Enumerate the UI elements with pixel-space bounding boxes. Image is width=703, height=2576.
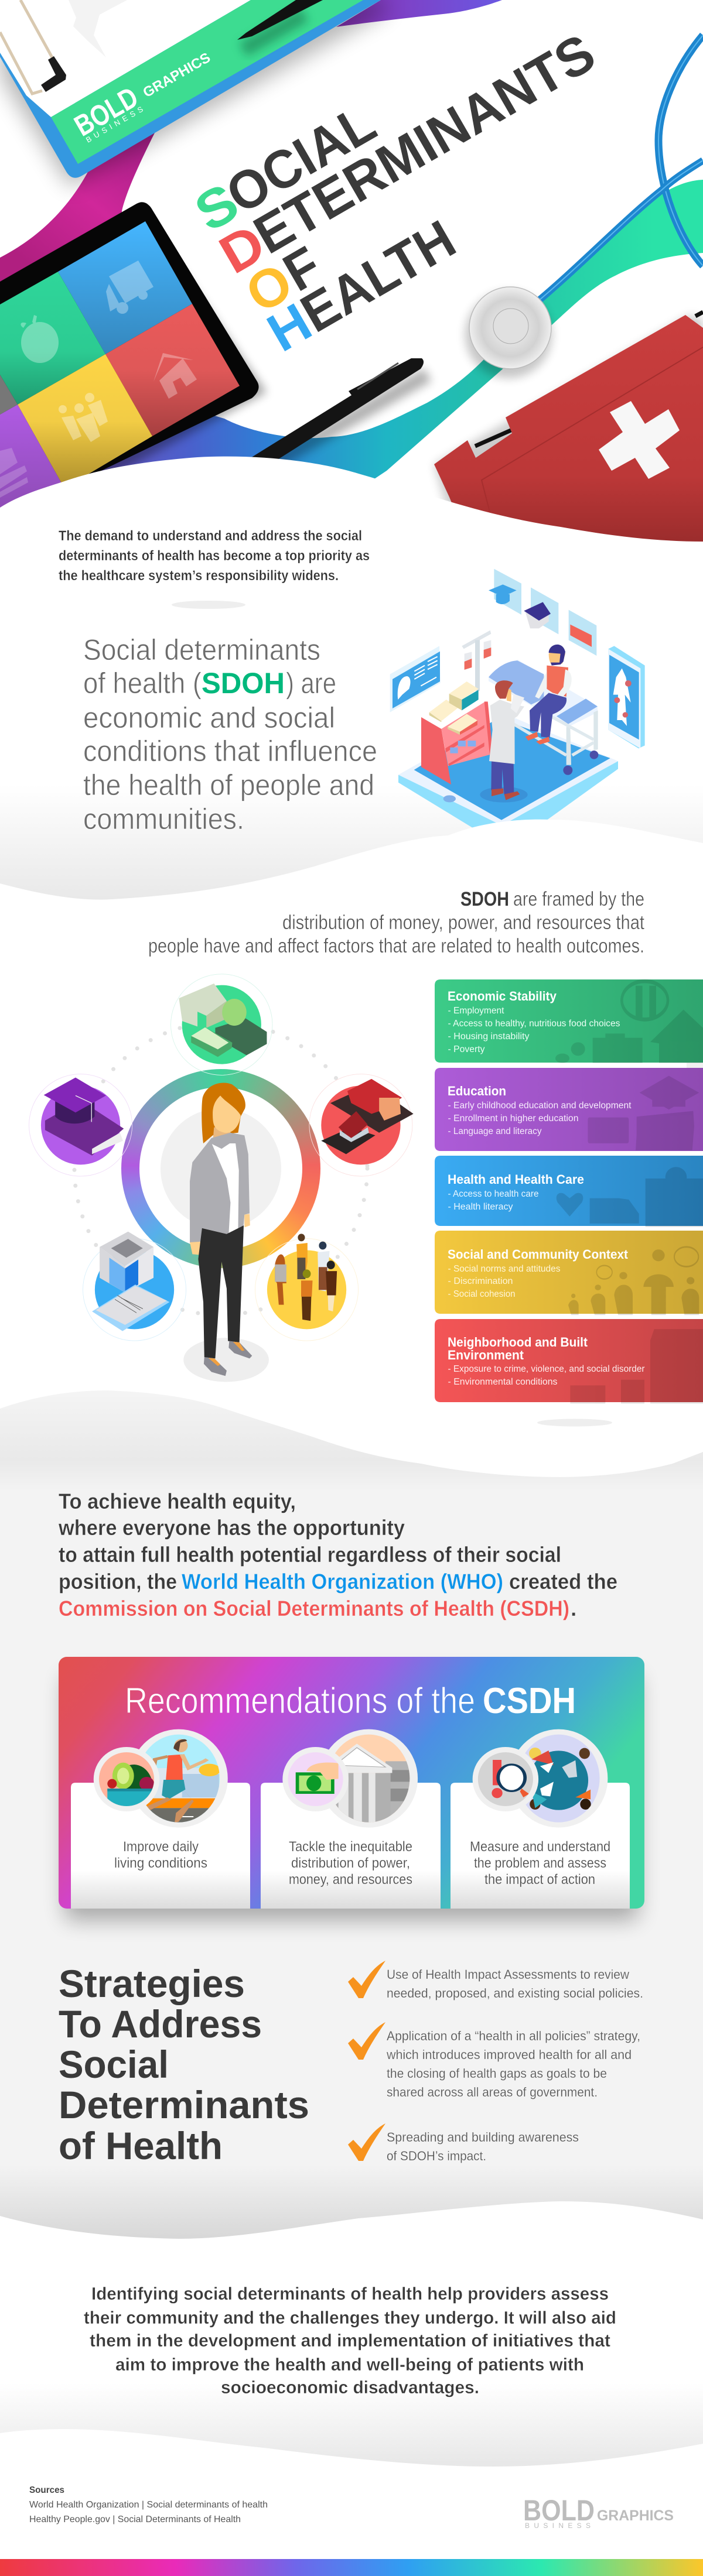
icon: ambulance <box>106 261 153 314</box>
card icons <box>568 1247 699 1315</box>
recommendation text 1: Improve daily <box>123 1839 199 1855</box>
dotted orbit <box>74 1022 367 1315</box>
rainbow footer bar <box>0 2559 703 2576</box>
SDOH bold: SDOH <box>460 888 509 910</box>
logo on clipboard: GRAPHICS <box>141 50 213 101</box>
card: economic stability <box>435 979 703 1063</box>
highlight: WHO: World Health Organization (WHO) <box>182 1570 503 1594</box>
footer logo: BUSINESS <box>525 2522 591 2530</box>
line: Of: F <box>274 235 331 303</box>
card: education: - Early childhood education and development <box>448 1101 632 1111</box>
circle: community <box>255 1234 359 1341</box>
IV stand <box>462 631 491 691</box>
pen body <box>243 358 424 463</box>
ring inner grey <box>161 1108 281 1229</box>
colored ring <box>121 1069 320 1268</box>
text <box>387 1967 643 2000</box>
card icons <box>557 1167 703 1227</box>
recommendation text 2 <box>289 1839 412 1888</box>
recommendation text 2: Tackle the inequitable <box>289 1839 412 1855</box>
line: Determinants: ETERMINANTS <box>244 23 605 265</box>
line: Social: S <box>185 172 248 243</box>
card: economic stability: - Employment <box>448 1006 504 1016</box>
footer logo <box>523 2494 674 2530</box>
card: economic stability: - Housing instability <box>448 1032 530 1042</box>
gradient swoosh: top purple <box>336 0 502 27</box>
text <box>386 2029 640 2099</box>
definition text: the health of people and <box>83 769 374 801</box>
recommendation icons <box>94 1729 608 1828</box>
card: education: - Enrollment in higher education <box>448 1114 579 1123</box>
card: social and community: - Social norms and attitudes <box>448 1264 561 1274</box>
pen on clipboard <box>237 0 323 40</box>
shirt <box>212 1143 239 1234</box>
card icons <box>555 981 703 1063</box>
logo on clipboard: BOLD <box>69 81 144 143</box>
icon: check <box>348 2123 385 2161</box>
pen clip <box>357 363 398 389</box>
white card 1 <box>71 1783 250 1909</box>
floating tile: education <box>489 569 521 615</box>
white wave under hero <box>0 457 703 820</box>
icon: runner <box>94 1729 228 1828</box>
recommendation text 3: the problem and assess <box>474 1855 606 1871</box>
card: health and health care: Health and Health Care <box>448 1172 584 1187</box>
small ellipse shadow 2 <box>537 1419 612 1426</box>
recommendation text 2: distribution of power, <box>291 1855 410 1871</box>
recommendations panel <box>59 1657 644 1909</box>
equity statement: To achieve health equity, <box>59 1489 296 1513</box>
line: Social: OCIAL <box>217 93 385 225</box>
tube highlight <box>529 160 703 309</box>
tablet <box>0 202 259 521</box>
card: economic stability: - Access to healthy, nutritious food choices <box>448 1019 620 1029</box>
foot right <box>233 1342 244 1351</box>
second wave <box>0 820 703 1417</box>
intro paragraph: the healthcare system’s responsibility widens. <box>59 568 339 584</box>
circle: education <box>29 1074 132 1176</box>
intro paragraph: determinants of health has become a top priority as <box>59 548 370 564</box>
card: education: - Language and literacy <box>448 1126 542 1136</box>
face <box>213 1095 241 1133</box>
card: social and community: - Social cohesion <box>448 1289 516 1299</box>
gap block <box>687 1063 703 1068</box>
text <box>387 2130 579 2163</box>
equity statement <box>58 1489 617 1621</box>
strategies heading: Social <box>59 2043 169 2086</box>
card: economic stability: - Poverty <box>448 1044 485 1054</box>
card: education <box>435 1068 703 1151</box>
loop highlight <box>658 35 703 266</box>
card: social and community: - Discrimination <box>448 1276 513 1286</box>
pen shadow on band <box>243 15 305 50</box>
shelf <box>421 681 493 785</box>
card: social and community <box>435 1231 703 1315</box>
definition text: communities. <box>83 803 244 835</box>
text: which introduces improved health for all and <box>386 2047 632 2062</box>
text: shared across all areas of government. <box>387 2085 598 2099</box>
text: Use of Health Impact Assessments to review <box>387 1967 629 1982</box>
conclusion paragraph: their community and the challenges they undergo. It will also aid <box>84 2307 616 2328</box>
shoe right <box>228 1341 252 1358</box>
doctor <box>480 680 528 803</box>
framing text <box>148 888 644 957</box>
determinant cards <box>435 979 703 1404</box>
highlight: CSDH: Commission on Social Determinants of Health (CSDH) <box>59 1597 569 1621</box>
text: the closing of health gaps as goals to be <box>387 2066 607 2081</box>
footer grey band <box>0 2383 703 2471</box>
definition text <box>83 633 377 835</box>
stethoscope tube <box>529 160 703 309</box>
metal clip <box>0 0 53 94</box>
conclusion paragraph <box>84 2283 616 2397</box>
circle: neighborhood <box>309 1074 414 1176</box>
conclusion paragraph: Identifying social determinants of health help providers assess <box>91 2283 609 2304</box>
white cross <box>599 401 680 479</box>
text: Application of a “health in all policies” strategy, <box>387 2029 640 2043</box>
panel heading: Recommendations of the <box>125 1681 475 1721</box>
jacket <box>190 1133 250 1243</box>
right phone <box>608 646 645 748</box>
definition text: Social determinants <box>83 633 320 666</box>
conclusion paragraph: them in the development and implementation of initiatives that <box>90 2330 610 2351</box>
tablet shadow <box>0 211 267 515</box>
icon: magnifier and meeting <box>473 1729 608 1828</box>
text: Spreading and building awareness <box>387 2130 579 2145</box>
recommendation text 1: living conditions <box>114 1855 207 1871</box>
highlight: SDOH: SDOH <box>202 667 285 700</box>
card: health and health care: - Health literacy <box>448 1202 513 1212</box>
framing text: distribution of money, power, and resources that <box>282 912 644 934</box>
card: health and health care <box>435 1156 703 1227</box>
floating tile: work <box>569 610 596 656</box>
icon: people <box>59 393 108 442</box>
sources: Sources <box>29 2485 64 2495</box>
logo on clipboard: BUSINESS <box>84 104 145 145</box>
strategy 1 <box>348 1961 643 2000</box>
first aid kit <box>434 312 703 544</box>
sources: Healthy People.gov | Social Determinants of Health <box>29 2515 241 2524</box>
strategies heading: To Address <box>59 2002 262 2046</box>
recommendations card shadow <box>64 1674 639 1920</box>
equity statement: where everyone has the opportunity <box>58 1516 405 1540</box>
foot left <box>209 1358 220 1366</box>
icon: apple <box>21 315 59 363</box>
platform <box>398 714 618 831</box>
clipboard shadow <box>0 0 387 187</box>
framing text: are framed by the <box>513 888 644 910</box>
line: Of <box>236 235 331 324</box>
marker pen <box>243 358 424 463</box>
hand left <box>190 1242 203 1255</box>
conclusion paragraph: socioeconomic disadvantages. <box>221 2377 479 2397</box>
footer logo: GRAPHICS <box>597 2508 674 2524</box>
sources: World Health Organization | Social determinants of health <box>29 2500 268 2510</box>
card: neighborhood <box>435 1319 703 1404</box>
medical illustration <box>390 569 645 831</box>
kit slot <box>475 312 703 446</box>
circle: health care <box>83 1232 186 1341</box>
determinant illustrations <box>29 974 414 1382</box>
equity statement: position, the <box>59 1570 177 1594</box>
floating tile: housing <box>524 587 558 634</box>
blue tile <box>58 221 192 354</box>
conclusion paragraph: aim to improve the health and well-being of patients with <box>115 2354 584 2375</box>
grey band above second wave <box>0 785 703 913</box>
gradient swoosh: pink <box>0 132 155 304</box>
intro paragraph: The demand to understand and address the social <box>59 528 362 544</box>
marker pen shadow <box>264 375 428 468</box>
clipboard board <box>0 0 381 178</box>
card icons <box>570 1329 703 1404</box>
shadow <box>183 1338 269 1382</box>
red tile <box>105 304 240 436</box>
footer logo: BOLD <box>523 2494 595 2527</box>
icon: house <box>153 353 197 399</box>
logo on clipboard <box>69 50 213 145</box>
kit groove <box>482 347 703 521</box>
text: needed, proposed, and existing social policies. <box>387 1986 643 2000</box>
title <box>185 23 605 363</box>
line: Health: EALTH <box>291 209 465 344</box>
ring inner white <box>139 1087 302 1250</box>
woman figure <box>183 1083 269 1382</box>
definition text: economic and social <box>83 701 335 734</box>
equity statement: to attain full health potential regardless of their social <box>59 1543 561 1567</box>
strategies heading: of Health <box>59 2124 223 2167</box>
purple tile <box>0 405 64 521</box>
strategies heading <box>59 1962 309 2167</box>
line: Determinants: D <box>210 213 275 285</box>
line: Of: O <box>236 252 302 324</box>
icon: books <box>0 448 28 498</box>
card: neighborhood: Environment <box>448 1348 524 1362</box>
card: education: Education <box>448 1084 506 1098</box>
line: Health <box>258 209 465 363</box>
first aid kit shadow <box>434 315 703 544</box>
clipboard <box>0 0 381 178</box>
card: health and health care: - Access to health care <box>448 1189 539 1199</box>
white card 2 <box>261 1783 441 1909</box>
equity statement: . <box>571 1597 576 1621</box>
card: neighborhood: - Exposure to crime, violence, and social disorder <box>448 1364 644 1374</box>
footer wave <box>0 2429 703 2576</box>
intro paragraph <box>59 528 370 584</box>
gradient swoosh: blue to green band <box>0 180 703 527</box>
card: neighborhood: Neighborhood and Built <box>448 1335 588 1349</box>
patient <box>525 645 572 745</box>
hand right <box>244 1214 250 1227</box>
recommendation text 3: the impact of action <box>484 1872 595 1888</box>
stethoscope <box>465 35 703 378</box>
circle: economic stability <box>171 974 272 1075</box>
strategy 3 <box>348 2123 579 2163</box>
left screen <box>390 646 441 712</box>
hair <box>202 1083 245 1143</box>
green tile <box>0 272 105 405</box>
text: of SDOH’s impact. <box>387 2149 486 2163</box>
equity statement: created the <box>509 1570 617 1594</box>
grey tile <box>0 375 18 415</box>
neck <box>213 1128 230 1148</box>
line: Health: H <box>258 292 321 363</box>
kit body <box>434 315 703 544</box>
definition text: conditions that influence <box>83 735 377 768</box>
caduceus watermark <box>69 0 127 57</box>
icon: check <box>348 1961 385 1998</box>
card: economic stability: Economic Stability <box>448 989 557 1003</box>
strategy 2 <box>348 2022 640 2099</box>
card icons <box>588 1076 699 1150</box>
yellow tile <box>18 354 152 488</box>
grey section <box>0 1390 703 2239</box>
card: social and community: Social and Community Context <box>448 1247 629 1262</box>
panel background <box>59 1657 644 1909</box>
chest piece <box>469 287 551 369</box>
sources <box>29 2485 268 2524</box>
shoe left <box>204 1357 227 1376</box>
recommendation text 3: Measure and understand <box>470 1839 610 1855</box>
green footer band <box>51 0 363 164</box>
bed <box>489 660 598 775</box>
strategies heading: Determinants <box>59 2083 309 2126</box>
recommendation text 2: money, and resources <box>289 1872 412 1888</box>
clipboard paper <box>0 0 251 117</box>
stethoscope loop <box>658 35 703 266</box>
icon: money and bank <box>282 1729 418 1828</box>
small ellipse shadow <box>172 601 245 609</box>
clip handle <box>41 56 66 92</box>
card: neighborhood: - Environmental conditions <box>448 1377 558 1387</box>
chest piece center <box>493 309 528 344</box>
tablet body <box>0 202 259 515</box>
white card 3 <box>451 1783 630 1909</box>
trousers <box>198 1225 244 1358</box>
strategies heading: Strategies <box>59 1962 245 2005</box>
icon: check <box>348 2022 385 2060</box>
definition text: ) are <box>286 667 336 700</box>
hero section <box>0 0 703 544</box>
definition text: of health ( <box>83 667 202 700</box>
recommendation text 1 <box>114 1839 207 1871</box>
stethoscope shadow <box>465 292 552 378</box>
panel heading: CSDH <box>483 1681 576 1721</box>
recommendation text 3 <box>470 1839 610 1888</box>
